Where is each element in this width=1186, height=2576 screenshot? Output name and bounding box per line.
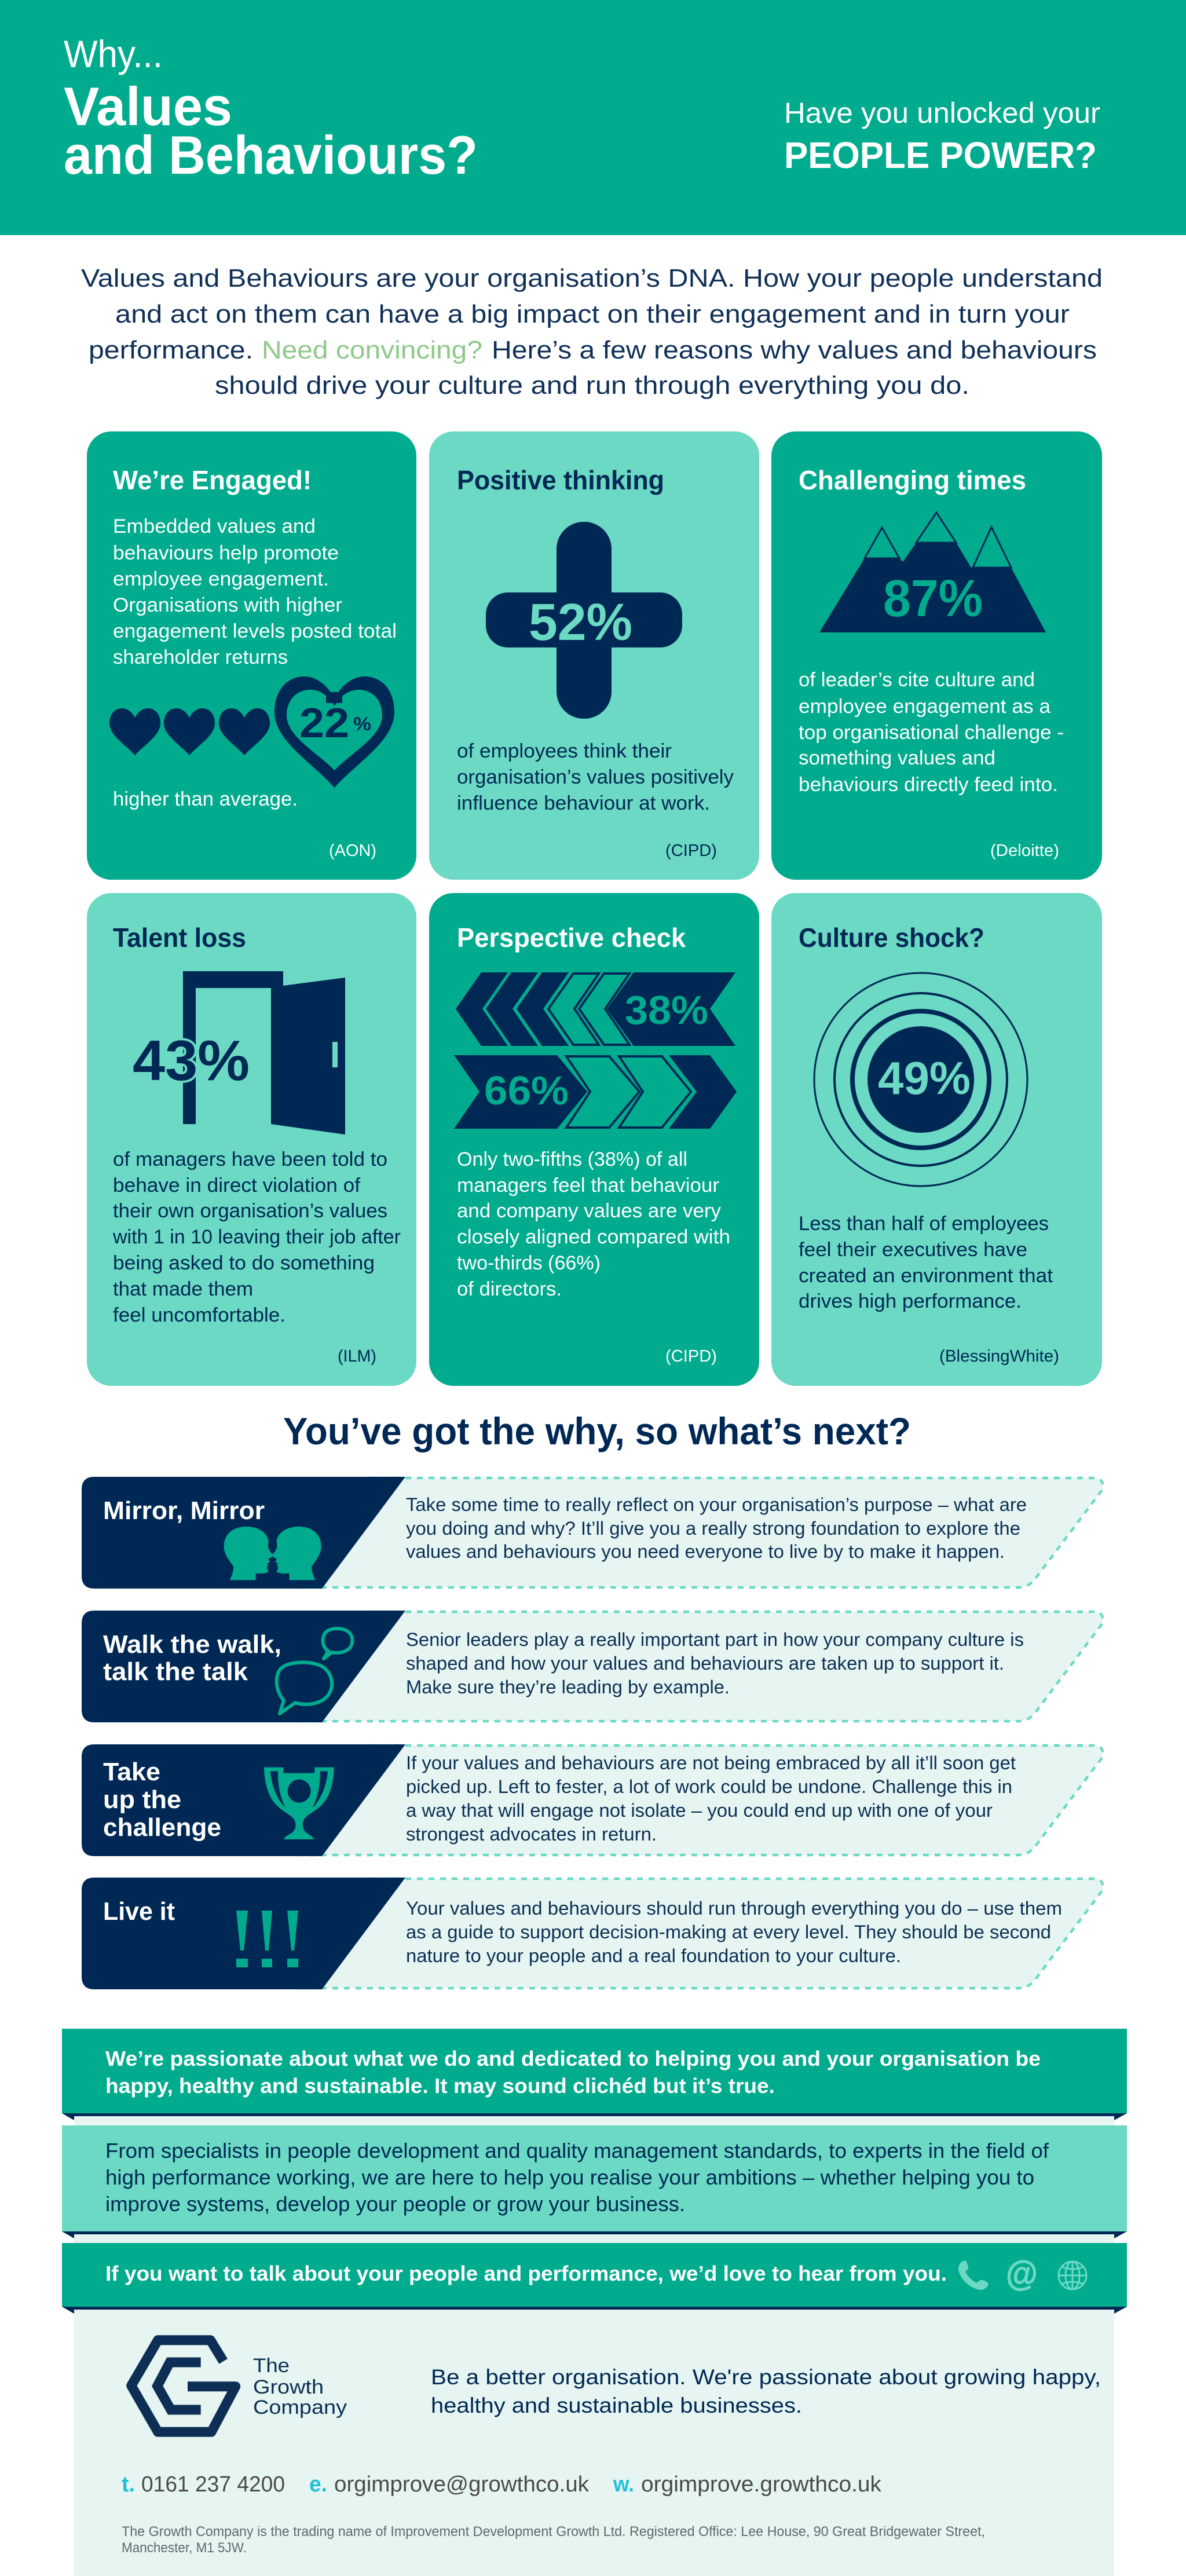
icon: left chevrons with 38% <box>456 972 735 1046</box>
body text: closely aligned compared with <box>457 1226 730 1248</box>
band: passionate <box>62 2029 1127 2120</box>
body text <box>406 1752 1016 1845</box>
body text: managers feel that behaviour <box>457 1174 719 1196</box>
logo wordmark: The <box>253 2355 290 2377</box>
body text <box>113 515 397 668</box>
heading: Walk the walk, <box>103 1630 281 1659</box>
title: Values <box>64 76 232 137</box>
intro text block: should drive your culture and run through everything you do. <box>215 371 969 400</box>
band text: improve systems, develop your people or grow your business. <box>105 2192 685 2216</box>
closing text: higher than average. <box>113 788 298 810</box>
logo wordmark: Growth <box>253 2376 324 2398</box>
logo wordmark <box>253 2355 347 2418</box>
body text <box>457 740 734 814</box>
body text: you doing and why? It’ll give you a really strong foundation to explore the <box>406 1518 1020 1539</box>
body text: behaviours directly feed into. <box>799 774 1058 796</box>
heading <box>103 1630 281 1686</box>
body text <box>406 1898 1062 1966</box>
body text: nature to your people and a real foundation to your culture. <box>406 1945 901 1966</box>
icon: open door with 43% <box>133 971 345 1135</box>
heading: Take <box>103 1758 160 1786</box>
contact details: e. <box>309 2472 327 2497</box>
band text: happy, healthy and sustainable. It may sound clichéd but it’s true. <box>105 2074 775 2098</box>
icon: large heart with 22%: 22 <box>299 700 349 747</box>
icon: plus with 52%: 52% <box>529 594 632 652</box>
band text <box>105 2047 1041 2098</box>
heading: Culture shock? <box>799 923 984 953</box>
logo <box>131 2340 347 2432</box>
body text: of employees think their <box>457 740 672 762</box>
section heading: You’ve got the why, so what’s next? <box>283 1410 911 1452</box>
panel: Talent loss <box>87 893 416 1386</box>
panel: Live it <box>82 1878 1103 1989</box>
body text: a way that will engage not isolate – you could end up with one of your <box>406 1800 993 1821</box>
heading: Challenging times <box>799 465 1026 495</box>
legal small print <box>122 2524 985 2556</box>
panel: We're Engaged <box>87 431 416 880</box>
body text <box>112 1148 401 1326</box>
icon: large heart with 22% <box>274 676 394 788</box>
heading: Talent loss <box>113 923 246 953</box>
body text: engagement levels posted total <box>113 620 397 642</box>
body text: and company values are very <box>457 1200 721 1222</box>
band text: If you want to talk about your people and performance, we’d love to hear from you. <box>105 2262 947 2285</box>
body text: feel their executives have <box>799 1239 1027 1261</box>
body text: two-thirds (66%) <box>457 1252 601 1274</box>
contact details: orgimprove.growthco.uk <box>641 2472 882 2497</box>
body text: drives high performance. <box>799 1290 1022 1312</box>
strapline: PEOPLE POWER? <box>784 134 1097 176</box>
heading: Live it <box>103 1897 175 1926</box>
logo wordmark: Company <box>253 2396 347 2418</box>
footer pale panel <box>74 2113 1114 2576</box>
source: (ILM) <box>338 1347 376 1366</box>
icon: at sign: @ <box>1005 2255 1037 2293</box>
contact details: w. <box>613 2472 634 2497</box>
panel: Take up the challenge <box>82 1744 1103 1856</box>
panel: Culture shock <box>771 893 1102 1386</box>
heading: challenge <box>103 1813 221 1842</box>
header banner <box>0 0 1186 235</box>
intro text block: Need convincing? <box>262 336 482 364</box>
source: (BlessingWhite) <box>939 1347 1059 1366</box>
heading <box>103 1758 221 1842</box>
intro text block <box>81 264 1103 400</box>
body text: Take some time to really reflect on your organisation’s purpose – what are <box>406 1494 1027 1515</box>
strapline <box>784 97 1100 176</box>
tagline: Be a better organisation. We're passionate about growing happy, <box>431 2365 1101 2389</box>
icon: small hearts <box>109 708 270 755</box>
band: contact prompt <box>62 2243 1127 2314</box>
icon: globe <box>1059 2262 1086 2289</box>
body text <box>799 669 1064 796</box>
source: (CIPD) <box>665 841 717 860</box>
body text: that made them <box>113 1278 253 1300</box>
intro text block: Here’s a few reasons why values and behaviours <box>492 336 1097 364</box>
band text: high performance working, we are here to help you realise your ambitions – whether helping you to <box>105 2165 1034 2189</box>
intro text block: Values and Behaviours are your organisation’s DNA. How your people understand <box>81 264 1103 292</box>
tagline <box>431 2365 1101 2417</box>
contact details: orgimprove@growthco.uk <box>334 2472 590 2497</box>
source: (Deloitte) <box>990 841 1059 860</box>
body text: of managers have been told to <box>113 1148 387 1170</box>
body text: Your values and behaviours should run through everything you do – use them <box>406 1898 1062 1919</box>
body text: shaped and how your values and behaviours are taken up to support it. <box>406 1653 1004 1674</box>
legal small print: Manchester, M1 5JW. <box>122 2540 247 2556</box>
body text: top organisational challenge - <box>799 722 1064 744</box>
contact details: 0161 237 4200 <box>141 2472 285 2497</box>
body text: Embedded values and <box>113 515 316 537</box>
body text: created an environment that <box>799 1265 1053 1287</box>
tagline: healthy and sustainable businesses. <box>431 2394 802 2417</box>
body text <box>457 1148 730 1300</box>
strapline: Have you unlocked your <box>784 97 1100 129</box>
heading: Mirror, Mirror <box>103 1496 265 1525</box>
icon: large heart with 22%: % <box>353 713 371 734</box>
logo mark <box>131 2340 236 2432</box>
intro text block: and act on them can have a big impact on their engagement and in turn your <box>115 300 1070 328</box>
band text <box>105 2139 1049 2216</box>
body text: employee engagement. <box>113 568 329 590</box>
body text <box>799 1213 1053 1312</box>
body text: Less than half of employees <box>799 1213 1049 1235</box>
body text: with 1 in 10 leaving their job after <box>112 1226 401 1248</box>
icon: open door with 43%: 43% <box>133 1029 250 1092</box>
band: specialists <box>62 2125 1127 2238</box>
body text <box>406 1629 1024 1697</box>
panel: Challenging times <box>771 431 1102 880</box>
body text: If your values and behaviours are not being embraced by all it’ll soon get <box>406 1752 1016 1773</box>
heading: up the <box>103 1785 181 1814</box>
body text: something values and <box>799 747 995 769</box>
body text: influence behaviour at work. <box>457 792 710 814</box>
body text: behaviours help promote <box>113 542 339 564</box>
panel: Mirror, Mirror <box>82 1477 1103 1589</box>
icon: two faces <box>224 1527 321 1580</box>
body text: as a guide to support decision-making at every level. They should be second <box>406 1922 1051 1942</box>
title <box>64 32 478 185</box>
body text: values and behaviours you need everyone to live by to make it happen. <box>406 1541 1005 1562</box>
intro text block: performance. <box>89 336 253 364</box>
icon: concentric circles with 49%: 49% <box>878 1052 971 1104</box>
body text: their own organisation’s values <box>113 1200 387 1222</box>
body text: shareholder returns <box>113 646 288 668</box>
icon: concentric circles with 49% <box>814 973 1027 1186</box>
icon: speech bubbles <box>277 1629 352 1714</box>
body text: strongest advocates in return. <box>406 1824 657 1845</box>
icon: trophy <box>264 1768 334 1839</box>
body text: Make sure they’re leading by example. <box>406 1677 730 1697</box>
body text: Only two-fifths (38%) of all <box>457 1148 687 1170</box>
body text: Senior leaders play a really important part in how your company culture is <box>406 1629 1024 1650</box>
body text: of leader’s cite culture and <box>799 669 1035 691</box>
body text: of directors. <box>457 1278 562 1300</box>
body text: organisation’s values positively <box>457 766 734 788</box>
contact details: t. <box>122 2472 135 2497</box>
contact details <box>122 2472 882 2497</box>
heading: Perspective check <box>457 923 686 953</box>
icon: exclamation marks <box>236 1911 298 1967</box>
source: (AON) <box>329 841 376 860</box>
source: (CIPD) <box>665 1347 717 1366</box>
panel: Perspective check <box>429 893 759 1386</box>
icon: plus with 52% <box>486 522 682 719</box>
body text: being asked to do something <box>113 1252 375 1274</box>
band text: From specialists in people development and quality management standards, to experts in the field of <box>105 2139 1049 2162</box>
body text: behave in direct violation of <box>113 1174 361 1196</box>
panel: Positive thinking <box>429 431 759 880</box>
legal small print: The Growth Company is the trading name of Improvement Development Growth Ltd. Registered Office: Lee House, 90 Great Bridgewater Street, <box>122 2524 985 2540</box>
body text: Organisations with higher <box>113 594 342 616</box>
title: and Behaviours? <box>64 125 478 185</box>
body text: employee engagement as a <box>799 696 1050 718</box>
body text <box>406 1494 1027 1562</box>
icon: right chevrons with 66%: 66% <box>484 1068 569 1113</box>
band text: We’re passionate about what we do and dedicated to helping you and your organisation be <box>105 2047 1041 2070</box>
icon: left chevrons with 38%: 38% <box>625 987 708 1033</box>
heading: We’re Engaged! <box>113 465 312 495</box>
panel: Walk the walk <box>82 1611 1103 1722</box>
title: Why... <box>64 32 163 75</box>
heading: Positive thinking <box>457 465 664 495</box>
body text: feel uncomfortable. <box>113 1304 285 1326</box>
icon: mountains with 87%: 87% <box>883 570 983 628</box>
body text: picked up. Left to fester, a lot of work could be undone. Challenge this in <box>406 1776 1012 1797</box>
icon: phone <box>958 2260 989 2290</box>
icon: right chevrons with 66% <box>454 1055 737 1129</box>
icon: mountains with 87% <box>819 513 1046 632</box>
heading: talk the talk <box>103 1657 248 1686</box>
